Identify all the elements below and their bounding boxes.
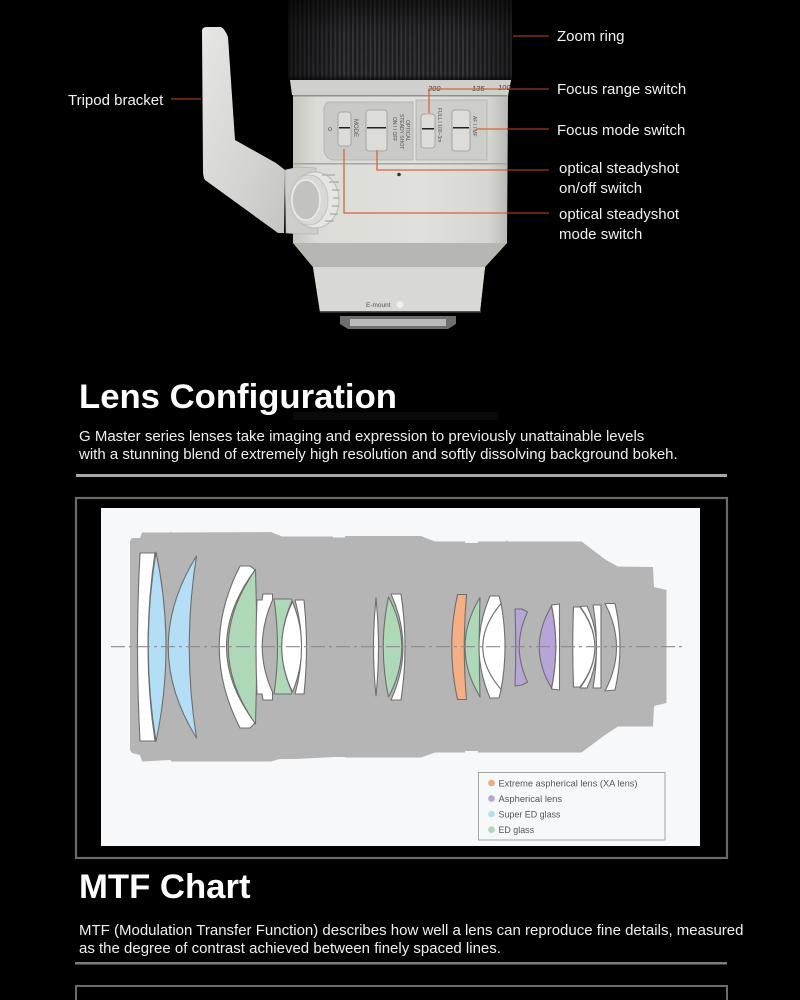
group 5: aspherical	[515, 604, 560, 690]
label: zoom ring: Zoom ring	[557, 28, 625, 45]
lens configuration description: with a stunning blend of extremely high resolution and softly dissolving background bokeh.	[78, 446, 678, 463]
panel: lens diagram	[101, 508, 700, 846]
leader: focus range outer	[507, 88, 549, 90]
leader: tripod bracket	[171, 98, 201, 100]
e-mount label: E-mount	[366, 302, 391, 309]
group 6: rear white elements	[573, 604, 620, 691]
panel labels: STEADY SHOT	[398, 114, 404, 149]
lens elements	[138, 552, 620, 742]
focus range switch	[421, 114, 435, 148]
label: steadyshot mode: mode switch	[559, 226, 642, 243]
leader: focus mode outer	[507, 128, 549, 130]
black zoom ring	[288, 0, 512, 80]
heading: MTF chart: MTF Chart	[79, 868, 251, 906]
group 4: XA, ED and white	[452, 594, 505, 700]
legend item: XA lens: Extreme aspherical lens (XA lens)	[498, 778, 638, 790]
divider rule	[76, 474, 727, 477]
legend item: super ED: Super ED glass	[498, 810, 561, 820]
e-mount label	[366, 301, 404, 309]
lens product photo	[202, 0, 512, 329]
legend item: ED: ED glass	[498, 825, 534, 836]
faint band under heading	[293, 412, 498, 420]
tripod bracket shape	[202, 27, 285, 233]
panel labels: OPTICAL	[404, 120, 410, 142]
legend	[478, 772, 665, 840]
leader: steadyshot on/off	[377, 150, 507, 170]
callout labels	[68, 28, 686, 243]
label: steadyshot on/off: on/off switch	[559, 180, 642, 197]
divider rule	[75, 962, 727, 964]
legend item: aspherical: Aspherical lens	[498, 794, 562, 805]
panel labels: ON I I OFF	[391, 117, 397, 141]
mode switch	[338, 112, 351, 146]
next panel frame	[76, 986, 727, 1000]
panel labels: FULL I 100–3m	[436, 108, 442, 142]
frame around lens diagram	[76, 498, 727, 858]
panel labels	[352, 108, 477, 149]
collar block	[285, 167, 318, 234]
leader: steadyshot on/off outer	[507, 169, 549, 171]
group 3: thin lens and ED	[374, 594, 405, 700]
zoom scale numbers: 100	[498, 83, 511, 92]
leader: focus mode	[476, 128, 507, 130]
group 2: meniscus and ED	[219, 566, 306, 728]
label: steadyshot mode: optical steadyshot	[559, 206, 679, 223]
tripod locking knob	[290, 172, 340, 228]
lens mount	[340, 316, 456, 329]
heading: lens configuration: Lens Configuration	[79, 378, 397, 416]
leader: zoom ring	[513, 35, 549, 37]
zoom scale numbers	[427, 83, 511, 93]
label: focus mode switch: Focus mode switch	[557, 122, 685, 139]
zoom scale numbers: 200	[427, 84, 441, 93]
group 1: white and super ED	[138, 552, 196, 742]
barrel dot	[397, 173, 401, 176]
barrel shading bands	[290, 80, 511, 312]
steadyshot switch	[366, 110, 387, 151]
label: focus range switch: Focus range switch	[557, 81, 686, 98]
panel labels: MODE	[352, 119, 358, 137]
panel labels: AF I I MF	[471, 116, 477, 137]
white lens barrel	[290, 80, 511, 312]
leader: steadyshot mode outer	[507, 212, 549, 214]
label: tripod bracket: Tripod bracket	[68, 92, 164, 109]
leader: focus range	[429, 89, 507, 113]
optical axis	[111, 646, 686, 648]
orange callout leader lines	[171, 36, 549, 213]
focus mode switch	[452, 110, 470, 151]
zoom scale numbers: 135	[472, 84, 485, 93]
MTF description: as the degree of contrast achieved between finely spaced lines.	[79, 940, 501, 957]
lens configuration description: G Master series lenses take imaging and expression to previously unattainable levels	[79, 428, 644, 445]
switch panel	[324, 100, 487, 160]
leader: steadyshot mode	[344, 149, 507, 213]
MTF description: MTF (Modulation Transfer Function) describes how well a lens can reproduce fine details, measured	[79, 922, 743, 939]
gray lens barrel cross-section	[130, 532, 666, 762]
label: steadyshot on/off: optical steadyshot	[559, 160, 679, 177]
